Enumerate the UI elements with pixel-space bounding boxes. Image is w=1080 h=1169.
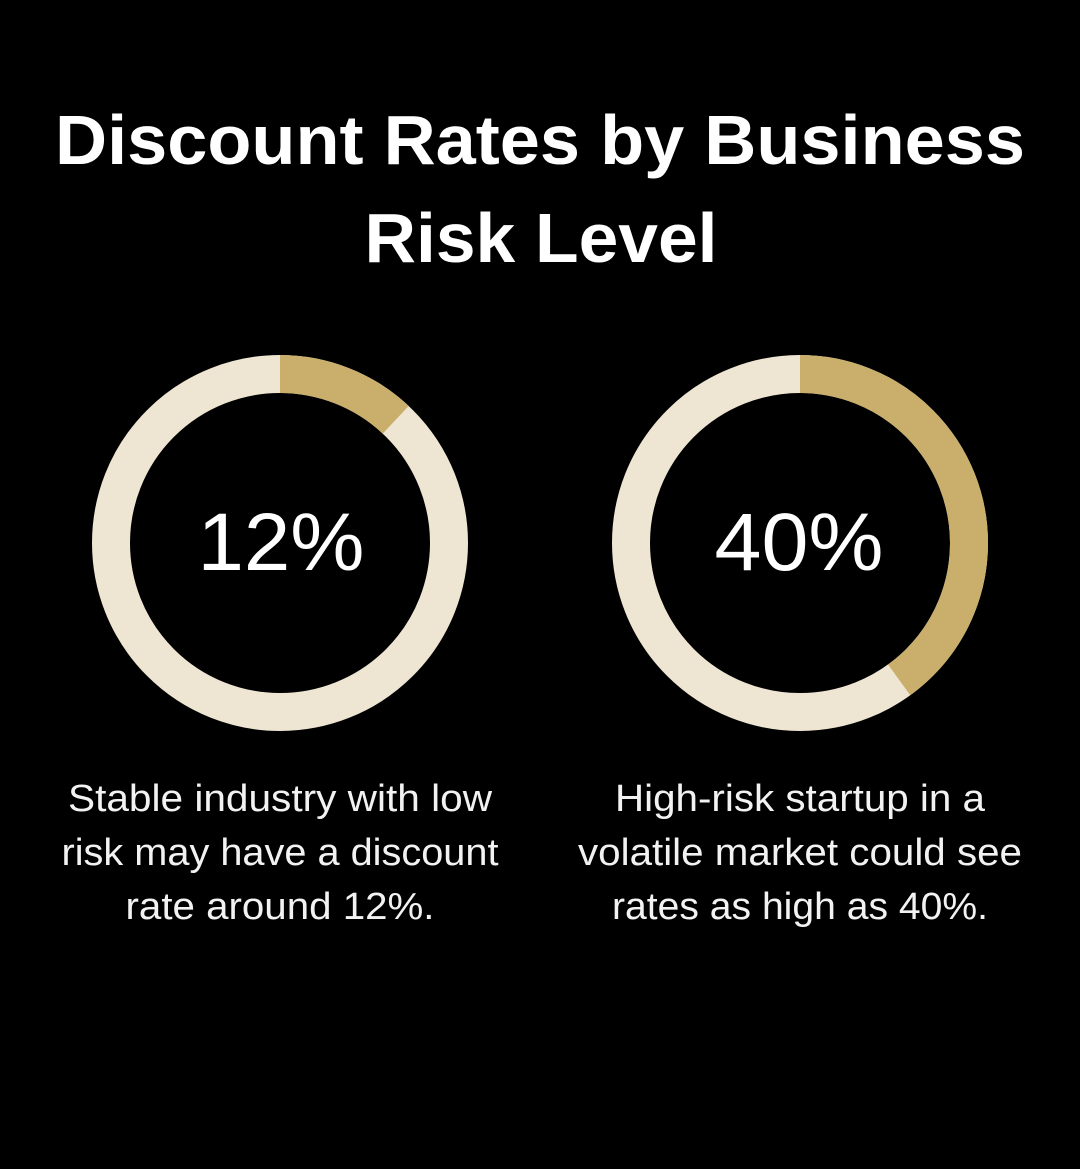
donut chart: 40%: 40% — [714, 497, 884, 588]
caption: stable industry — [62, 778, 499, 928]
caption: high-risk startup — [578, 778, 1022, 928]
donut chart: 40% — [631, 374, 969, 712]
title — [55, 101, 1025, 277]
caption: high-risk startup: rates as high as 40%. — [612, 886, 988, 928]
title: Discount Rates by Business — [55, 101, 1025, 179]
caption: stable industry: rate around 12%. — [126, 886, 434, 928]
donut chart: 12% — [111, 374, 449, 712]
caption: high-risk startup: volatile market could see — [578, 832, 1022, 874]
caption: high-risk startup: High-risk startup in a — [615, 778, 986, 820]
caption: stable industry: Stable industry with low — [68, 778, 493, 820]
donut chart: 12%: 12% — [198, 497, 364, 588]
caption: stable industry: risk may have a discount — [62, 832, 499, 874]
title: Risk Level — [364, 199, 718, 277]
